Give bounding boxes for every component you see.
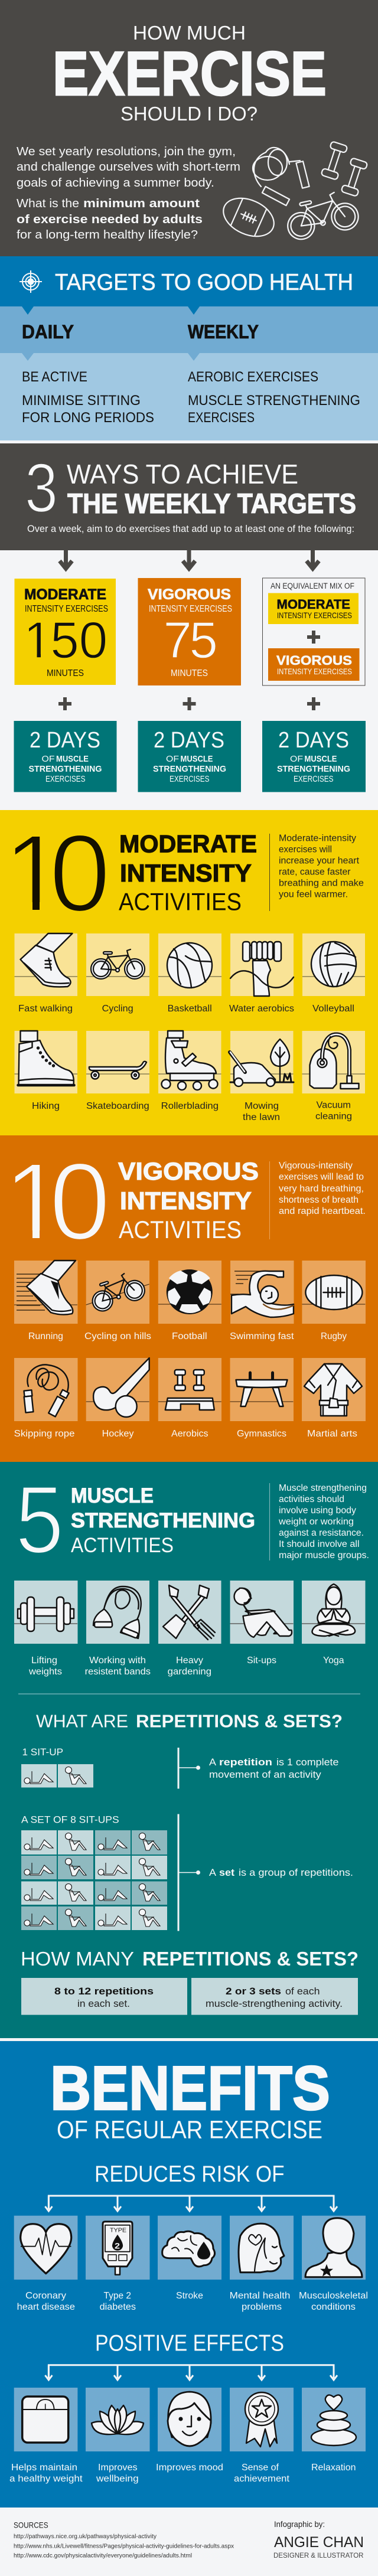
arrows: reduces risk xyxy=(45,2196,337,2211)
sources: SOURCES xyxy=(14,2521,48,2530)
icon: bicycle xyxy=(283,188,361,241)
labels: positive effects: Improves mood xyxy=(156,2463,223,2473)
label row: moderate 2: cleaning xyxy=(315,1111,352,1122)
set definition xyxy=(178,1814,353,1931)
strength box 3: EXERCISES xyxy=(294,774,333,784)
description: rate, cause faster xyxy=(279,867,351,877)
labels: reduces risk: heart disease xyxy=(17,2302,75,2312)
credit: DESIGNER & ILLUSTRATOR xyxy=(273,2551,364,2559)
intro text: for a long-term healthy lifestyle? xyxy=(17,228,198,241)
labels: muscle activities: Sit-ups xyxy=(247,1656,276,1666)
icon: rugby ball xyxy=(217,191,280,244)
heading: reduces risk: REDUCES RISK OF xyxy=(94,2162,285,2187)
panel: three ways heading xyxy=(0,443,378,550)
description: exercises will xyxy=(279,844,332,855)
tile: diabetes meter: 2 xyxy=(115,2241,120,2251)
set of eight sit-ups xyxy=(21,1814,167,1930)
strength box 3: 2 DAYS xyxy=(278,728,349,753)
panel: muscle strengthening activities xyxy=(0,1462,378,2038)
description: exercises will lead to xyxy=(279,1172,364,1182)
tile: mowing the lawn xyxy=(230,1031,294,1093)
tile: heavy gardening xyxy=(158,1581,221,1644)
labels: reduces risk: conditions xyxy=(311,2302,356,2312)
box: sets: 2 or 3 sets xyxy=(226,1986,281,1997)
set definition: is a group of repetitions. xyxy=(239,1867,353,1878)
column: daily xyxy=(22,321,154,426)
label row: vigorous 2: Aerobics xyxy=(171,1429,208,1439)
description xyxy=(278,1483,369,1560)
tile: basketball xyxy=(158,933,221,996)
heading: what are repetitions and sets xyxy=(36,1711,343,1731)
repetition definition: repetition xyxy=(219,1756,272,1768)
set definition: set xyxy=(219,1867,234,1878)
description xyxy=(279,1161,366,1216)
labels: positive effects: Relaxation xyxy=(311,2463,356,2473)
heading: VIGOROUS xyxy=(118,1157,259,1185)
labels: reduces risk: Musculoskeletal xyxy=(299,2291,368,2301)
tile: resistance bands xyxy=(86,1581,149,1644)
title: BENEFITS xyxy=(50,2053,330,2123)
credit xyxy=(273,2519,364,2559)
tile: cycling on hills xyxy=(86,1261,149,1324)
tile: rosette xyxy=(230,2388,294,2451)
panel: moderate intensity activities xyxy=(0,810,378,1135)
title: SHOULD I DO? xyxy=(120,103,258,125)
strength box 2: 2 DAYS xyxy=(154,728,224,753)
label row: moderate 1: Volleyball xyxy=(312,1004,354,1014)
labels: positive effects: Sense of xyxy=(242,2463,279,2473)
number 5: 5 xyxy=(15,1465,64,1573)
option: equivalent mix: VIGOROUS xyxy=(276,653,352,668)
tile: scale xyxy=(14,2388,77,2451)
tile: skipping rope xyxy=(14,1358,78,1421)
labels: reduces risk: Mental health xyxy=(230,2291,290,2301)
intro text xyxy=(17,145,240,241)
labels: reduces risk: Coronary xyxy=(25,2291,66,2301)
labels: muscle activities: Working with xyxy=(89,1656,146,1666)
description: Vigorous-intensity xyxy=(279,1161,353,1171)
option: equivalent mix xyxy=(262,578,365,685)
strength box 1: STRENGTHENING xyxy=(28,764,102,774)
strength box 2: OF xyxy=(166,754,179,764)
description: shortness of breath xyxy=(279,1195,359,1205)
intro text: What is the xyxy=(17,197,79,210)
intro text: and challenge ourselves with short-term xyxy=(17,161,240,174)
label row: moderate 2: Rollerblading xyxy=(161,1101,219,1111)
label row: moderate 2: the lawn xyxy=(243,1112,280,1122)
description: very hard breathing, xyxy=(279,1184,364,1194)
labels: reduces risk xyxy=(17,2291,368,2312)
label row: vigorous 2: Skipping rope xyxy=(14,1429,75,1439)
strength box 1 xyxy=(14,721,117,792)
option: moderate: INTENSITY EXERCISES xyxy=(25,604,108,614)
intro text: of exercise needed by adults xyxy=(17,213,203,226)
label row: vigorous 2 xyxy=(14,1429,357,1439)
strength box 1: OF xyxy=(41,754,54,764)
strength box 3: OF xyxy=(290,754,303,764)
tile: water aerobics xyxy=(230,933,294,996)
tile: cycling xyxy=(86,933,149,996)
one sit-up: 1 SIT-UP xyxy=(22,1746,63,1758)
option: vigorous: VIGOROUS xyxy=(148,586,231,603)
tile: sit-ups xyxy=(230,1581,294,1644)
tile: diabetes meter xyxy=(86,2216,150,2280)
labels: muscle activities xyxy=(28,1656,344,1677)
box: sets xyxy=(191,1978,358,2015)
labels: muscle activities: gardening xyxy=(168,1667,211,1677)
option: vigorous: INTENSITY EXERCISES xyxy=(149,604,232,614)
tile: aerobics xyxy=(158,1358,221,1421)
labels: positive effects: achievement xyxy=(234,2474,290,2484)
title xyxy=(53,22,327,125)
description: breathing and make xyxy=(279,879,364,888)
panel: vigorous intensity activities xyxy=(0,1135,378,1462)
icon: skipping rope xyxy=(253,148,309,205)
description: Muscle strengthening xyxy=(279,1483,367,1493)
column: weekly: WEEKLY xyxy=(188,321,259,342)
column: weekly xyxy=(188,321,360,426)
tile: fast walking xyxy=(14,933,77,996)
labels: reduces risk: problems xyxy=(242,2302,282,2312)
column: daily: MINIMISE SITTING xyxy=(22,393,141,409)
box: repetitions: in each set. xyxy=(77,1998,130,2009)
strength box 1: MUSCLE xyxy=(56,754,89,764)
heading: what are repetitions and sets: REPETITIONS & SETS? xyxy=(136,1711,343,1731)
heading: how many repetitions and sets: HOW MANY xyxy=(21,1948,134,1970)
description: and rapid heartbeat. xyxy=(279,1206,366,1216)
label row: moderate 1: Basketball xyxy=(168,1004,212,1014)
tile: rugby xyxy=(302,1261,366,1324)
option: vigorous: MINUTES xyxy=(171,668,208,678)
column: daily: FOR LONG PERIODS xyxy=(22,410,154,426)
tile: lotus xyxy=(86,2388,150,2451)
tile: hockey xyxy=(86,1358,149,1421)
column: weekly: EXERCISES xyxy=(188,410,255,426)
panel: footer xyxy=(0,2508,378,2576)
subtitle: Over a week, aim to do exercises that add up to at least one of the following: xyxy=(27,523,354,534)
heading xyxy=(118,1157,259,1243)
label row: vigorous 1: Football xyxy=(172,1331,207,1341)
label row: moderate 1: Cycling xyxy=(102,1004,133,1014)
set definition: A xyxy=(209,1867,217,1878)
option: equivalent mix: AN EQUIVALENT MIX OF xyxy=(271,582,354,590)
option: equivalent mix: INTENSITY EXERCISES xyxy=(277,610,352,620)
heading: positive effects: POSITIVE EFFECTS xyxy=(95,2331,284,2356)
arrows: positive effects xyxy=(45,2365,337,2380)
strength box 2: MUSCLE xyxy=(181,754,213,764)
label row: vigorous 2: Hockey xyxy=(102,1429,134,1439)
labels: positive effects: wellbeing xyxy=(96,2474,139,2484)
heading: MODERATE xyxy=(119,830,257,857)
labels: reduces risk: Type 2 xyxy=(104,2291,131,2301)
labels: muscle activities: Lifting xyxy=(31,1656,57,1666)
heading: WAYS TO ACHIEVE xyxy=(67,459,298,489)
number 10: 10 xyxy=(4,1141,110,1263)
option: vigorous: 75 xyxy=(163,612,218,669)
plus signs xyxy=(58,697,320,710)
label row: moderate 1: Fast walking xyxy=(18,1004,73,1014)
tile: swimming fast xyxy=(230,1261,294,1324)
repetition definition xyxy=(178,1748,339,1789)
arrows xyxy=(60,550,319,569)
option: moderate: MINUTES xyxy=(47,668,84,678)
labels: muscle activities: Heavy xyxy=(176,1656,203,1666)
description: major muscle groups. xyxy=(279,1550,369,1560)
tile: brain stroke xyxy=(158,2216,221,2280)
sources: http://www.cdc.gov/physicalactivity/everyone/guidelines/adults.html xyxy=(14,2552,192,2559)
label row: vigorous 2: Gymnastics xyxy=(237,1429,286,1439)
intro text: minimum amount xyxy=(83,197,200,210)
title: HOW MUCH xyxy=(133,22,246,44)
tile: football xyxy=(158,1261,221,1324)
heading: ACTIVITIES xyxy=(71,1534,174,1557)
heading: ACTIVITIES xyxy=(119,1216,242,1243)
tile: vacuum cleaning xyxy=(302,1031,365,1093)
intro text: We set yearly resolutions, join the gym, xyxy=(17,145,236,158)
strength box 3 xyxy=(262,721,366,792)
label row: vigorous 1: Swimming fast xyxy=(230,1331,294,1341)
panel: intro header xyxy=(0,0,378,256)
description: Moderate-intensity xyxy=(279,834,356,843)
description xyxy=(279,834,364,900)
column: daily: BE ACTIVE xyxy=(22,369,87,385)
heading xyxy=(71,1484,255,1557)
description: increase your heart xyxy=(279,856,360,866)
icon: dumbbells xyxy=(321,141,368,197)
option: moderate xyxy=(14,579,116,685)
option: equivalent mix: INTENSITY EXERCISES xyxy=(277,667,352,676)
description: weight or working xyxy=(278,1517,354,1527)
panel: three options xyxy=(0,550,378,810)
box: repetitions: 8 to 12 repetitions xyxy=(54,1986,154,1997)
labels: muscle activities: Yoga xyxy=(323,1656,344,1666)
sources: http://pathways.nice.org.uk/pathways/physical-activity xyxy=(14,2533,157,2540)
strength box 1: EXERCISES xyxy=(45,774,85,784)
label row: moderate 1 xyxy=(18,1004,354,1014)
label row: moderate 2: Vacuum xyxy=(317,1101,351,1110)
panel: targets to good health xyxy=(0,256,378,443)
box: sets: of each xyxy=(285,1986,320,1997)
sources xyxy=(14,2521,234,2559)
sources: http://www.nhs.uk/Livewell/fitness/Pages/physical-activity-guidelines-for-adults.aspx xyxy=(14,2543,234,2550)
tile: diabetes meter: TYPE xyxy=(110,2228,126,2234)
tile: lifting weights xyxy=(14,1581,78,1644)
labels: positive effects: Improves xyxy=(98,2463,138,2473)
panel: benefits xyxy=(0,2041,378,2508)
tile: musculoskeletal xyxy=(302,2216,366,2280)
label row: vigorous 1: Cycling on hills xyxy=(84,1331,151,1341)
strength box 3: STRENGTHENING xyxy=(277,764,350,774)
heading: what are repetitions and sets: WHAT ARE xyxy=(36,1711,128,1731)
labels: positive effects xyxy=(9,2463,356,2484)
heading: MUSCLE xyxy=(71,1484,154,1507)
strength box 2: STRENGTHENING xyxy=(153,764,226,774)
icon: target xyxy=(19,270,42,293)
tile: heart xyxy=(14,2216,77,2280)
heading: STRENGTHENING xyxy=(71,1509,255,1532)
tile: yoga xyxy=(302,1581,365,1644)
tile: martial arts xyxy=(302,1358,366,1421)
heading: INTENSITY xyxy=(120,1187,252,1214)
column: weekly: AEROBIC EXERCISES xyxy=(188,369,318,385)
labels: reduces risk: Stroke xyxy=(176,2291,203,2301)
heading: TARGETS TO GOOD HEALTH xyxy=(55,270,353,295)
tile: hiking xyxy=(14,1031,77,1093)
labels: muscle activities: resistent bands xyxy=(85,1667,151,1677)
description: against a resistance. xyxy=(279,1528,364,1538)
tile: skateboarding xyxy=(86,1031,149,1093)
label row: vigorous 1: Rugby xyxy=(321,1331,347,1341)
label row: moderate 2: Hiking xyxy=(32,1101,60,1111)
heading: how many repetitions and sets: REPETITIONS & SETS? xyxy=(142,1948,359,1970)
tile: rollerblading xyxy=(158,1031,221,1093)
labels: reduces risk: diabetes xyxy=(100,2302,136,2312)
heading xyxy=(119,830,257,915)
number 3: 3 xyxy=(25,449,58,527)
label row: moderate 2 xyxy=(32,1101,352,1122)
labels: positive effects: Helps maintain xyxy=(11,2463,77,2473)
heading: how many repetitions and sets xyxy=(21,1948,359,1970)
description: It should involve all xyxy=(279,1539,360,1549)
description: you feel warmer. xyxy=(279,889,348,900)
heading xyxy=(67,459,356,519)
box: repetitions xyxy=(21,1978,187,2015)
label row: moderate 2: Mowing xyxy=(245,1101,279,1111)
title: OF REGULAR EXERCISE xyxy=(57,2116,322,2144)
tile: stones and heart xyxy=(302,2388,366,2451)
option: moderate: 150 xyxy=(24,612,107,669)
strength box 3: MUSCLE xyxy=(305,754,337,764)
option: vigorous xyxy=(138,578,241,685)
intro text: goals of achieving a summer body. xyxy=(17,177,214,190)
credit: Infographic by: xyxy=(274,2519,325,2529)
label row: vigorous 1 xyxy=(28,1331,347,1341)
tile: mental health xyxy=(230,2216,294,2280)
column: daily: DAILY xyxy=(22,321,74,342)
label row: moderate 2: Skateboarding xyxy=(86,1101,149,1111)
heading: ACTIVITIES xyxy=(119,888,242,915)
label row: vigorous 2: Martial arts xyxy=(307,1429,357,1439)
credit: ANGIE CHAN xyxy=(274,2534,364,2551)
set of eight sit-ups: A SET OF 8 SIT-UPS xyxy=(21,1814,119,1826)
heading: THE WEEKLY TARGETS xyxy=(67,488,356,519)
number 10: 10 xyxy=(4,812,110,935)
title: EXERCISE xyxy=(53,39,327,109)
strength box 2 xyxy=(138,721,241,792)
repetition definition: is 1 complete xyxy=(276,1756,339,1768)
labels: muscle activities: weights xyxy=(28,1667,62,1677)
strength box 2: EXERCISES xyxy=(170,774,209,784)
repetition definition: movement of an activity xyxy=(209,1769,321,1780)
heading: INTENSITY xyxy=(120,859,252,887)
column: weekly: MUSCLE STRENGTHENING xyxy=(188,393,360,409)
option: moderate: MODERATE xyxy=(24,586,106,603)
labels: positive effects: a healthy weight xyxy=(9,2474,83,2484)
one sit-up xyxy=(21,1746,93,1788)
label row: moderate 1: Water aerobics xyxy=(229,1004,294,1014)
description: activities should xyxy=(279,1494,344,1504)
strength box 1: 2 DAYS xyxy=(30,728,100,753)
tile: running xyxy=(14,1261,78,1324)
box: sets: muscle-strengthening activity. xyxy=(206,1998,343,2009)
tile: volleyball xyxy=(302,933,365,996)
repetition definition: A xyxy=(209,1756,217,1768)
label row: vigorous 1: Running xyxy=(28,1331,63,1341)
description: involve using body xyxy=(279,1506,356,1516)
tile: happy face xyxy=(158,2388,221,2451)
tile: gymnastics xyxy=(230,1358,294,1421)
option: equivalent mix: MODERATE xyxy=(276,597,350,612)
